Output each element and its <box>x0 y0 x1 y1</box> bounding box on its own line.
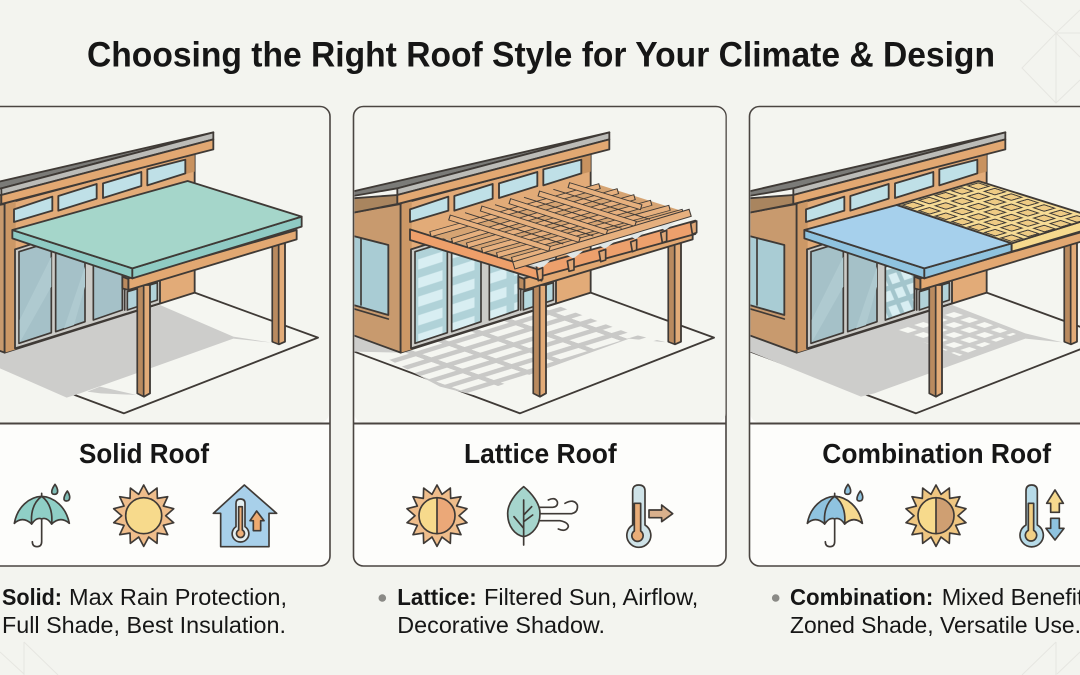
bullet text: solid: Max Rain Protection, <box>69 584 287 610</box>
icon: house with thermometer <box>213 485 277 547</box>
card: lattice roof <box>354 106 726 566</box>
panel: solid roof <box>0 106 330 638</box>
heading: lattice roof: Lattice Roof <box>464 438 617 469</box>
icon: two-tone sun <box>906 485 966 546</box>
icon: full sun <box>114 485 174 546</box>
icon: thermometer with up and down arrows <box>1020 485 1064 547</box>
icon: leaf and wind <box>508 487 577 545</box>
bullet dot: lattice <box>378 594 386 602</box>
card: combination roof <box>750 106 1080 566</box>
bullet dot: combination <box>772 594 780 602</box>
bullet text: solid: Solid: <box>2 584 62 610</box>
illustration: lattice roof patio <box>330 132 714 413</box>
icon: thermometer with arrow <box>627 485 673 547</box>
panel: lattice roof <box>330 106 726 638</box>
bullet text: combination: Combination: <box>790 584 933 610</box>
icon: umbrella with rain <box>14 484 70 547</box>
illustration: combination roof patio <box>726 132 1080 413</box>
card: solid roof <box>0 106 330 566</box>
bullet text line 2: solid: Full Shade, Best Insulation. <box>2 612 286 638</box>
panel: combination roof <box>726 106 1080 638</box>
icon: half sun <box>407 485 467 546</box>
bullet text: lattice: Lattice: <box>397 584 477 610</box>
title: Choosing the Right Roof Style for Your Climate & Design <box>87 34 995 74</box>
illustration: solid roof patio <box>0 132 318 413</box>
heading: solid roof: Solid Roof <box>79 438 210 469</box>
heading: combination roof: Combination Roof <box>822 438 1052 469</box>
bullet text line 2: lattice: Decorative Shadow. <box>397 612 605 638</box>
icon: two-tone umbrella <box>807 484 863 547</box>
bullet text: lattice: Filtered Sun, Airflow, <box>484 584 698 610</box>
